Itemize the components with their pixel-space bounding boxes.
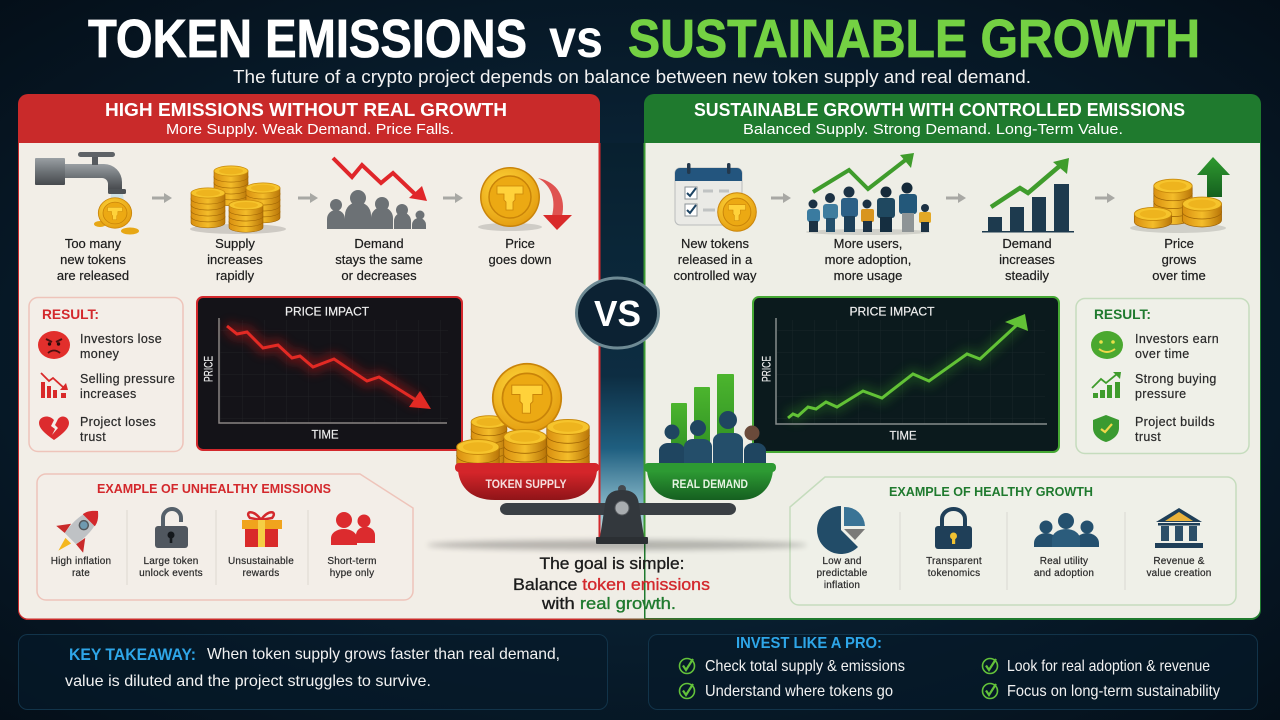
center gap and cream base <box>590 143 650 619</box>
icon: closed lock <box>935 509 972 549</box>
step labels <box>57 236 551 283</box>
badge: VS <box>576 278 658 348</box>
heading: right panel: SUSTAINABLE GROWTH WITH CONTROLLED EMISSIONS <box>694 99 1185 120</box>
panel: result positive: pressure <box>1135 387 1186 401</box>
panel: result positive: RESULT: <box>1094 306 1151 322</box>
green bowl: real demand <box>644 463 776 500</box>
chart: rising price impact: PRICE <box>760 356 774 382</box>
icon: broken heart <box>39 416 69 440</box>
icon: faucet with coin <box>35 152 139 234</box>
goal statement: with real growth. <box>541 594 676 613</box>
example labels: predictable <box>816 568 868 579</box>
heading: left panel: HIGH EMISSIONS WITHOUT REAL GROWTH <box>105 99 507 120</box>
panel: key takeaway: KEY TAKEAWAY: <box>69 646 196 664</box>
arrow <box>298 193 318 203</box>
icon: smiling face <box>1091 331 1123 359</box>
panel: invest like a pro: Check total supply & emissions <box>705 658 905 675</box>
step labels <box>673 236 1206 283</box>
example labels: Unsustainable <box>228 556 294 567</box>
icon: calendar with coin <box>675 163 757 232</box>
icon: rocket <box>45 498 111 564</box>
panel: result negative: increases <box>80 387 137 401</box>
step labels: more adoption, <box>825 252 911 267</box>
arrow <box>152 193 172 203</box>
step labels: controlled way <box>673 268 757 283</box>
icon: rising bar chart <box>982 158 1074 232</box>
title <box>88 9 1200 69</box>
example labels: Revenue & <box>1153 556 1205 567</box>
red bowl: token supply: TOKEN SUPPLY <box>486 479 567 491</box>
people row <box>807 182 931 232</box>
heading: left panel <box>105 99 507 138</box>
step labels: Demand <box>1002 236 1052 251</box>
panel: invest like a pro: Look for real adoption & revenue <box>1007 658 1210 675</box>
arrow <box>443 193 463 203</box>
icon: angry face <box>38 331 70 359</box>
panel: result positive: Investors earn <box>1135 332 1219 346</box>
step labels: Supply <box>215 236 255 251</box>
chart: rising price impact <box>753 297 1059 452</box>
step labels: more usage <box>834 268 902 283</box>
chart: rising price impact: TIME <box>890 428 916 442</box>
step labels: increases <box>207 252 263 267</box>
example labels: rate <box>72 568 90 579</box>
step labels: new tokens <box>60 252 126 267</box>
icon: gift <box>242 512 282 547</box>
panel: unhealthy emissions examples <box>37 474 413 600</box>
icon: shrinking crowd with falling arrow <box>327 158 427 229</box>
heading: left panel: More Supply. Weak Demand. Price Falls. <box>166 121 454 138</box>
example labels <box>816 556 1212 591</box>
example labels <box>51 556 377 579</box>
step labels: increases <box>999 252 1055 267</box>
icon: two people <box>331 512 375 545</box>
example labels: Short-term <box>327 556 377 567</box>
token supply pile <box>457 363 589 478</box>
heading: right panel <box>694 99 1185 138</box>
goal statement: The goal is simple: <box>540 554 684 573</box>
step labels: New tokens <box>681 236 749 251</box>
panel: healthy growth examples: EXAMPLE OF HEALTHY GROWTH <box>889 485 1093 499</box>
example labels: Large token <box>143 556 199 567</box>
panel: result positive: over time <box>1135 347 1190 361</box>
chart: falling price impact <box>197 297 462 450</box>
example labels: Transparent <box>926 556 982 567</box>
icon: three people <box>1034 513 1099 547</box>
icon: coins with up arrow <box>1130 157 1230 233</box>
panel: invest like a pro: Understand where tokens go <box>705 683 893 700</box>
panel: high emissions <box>18 94 600 620</box>
step labels: grows <box>1162 252 1197 267</box>
panel: unhealthy emissions examples: EXAMPLE OF UNHEALTHY EMISSIONS <box>97 482 331 496</box>
step labels: Demand <box>354 236 404 251</box>
panel: key takeaway: value is diluted and the project struggles to survive. <box>65 673 431 690</box>
step labels: are released <box>57 268 129 283</box>
icon: rising bars <box>1092 372 1121 398</box>
goal statement: Balance token emissions <box>513 575 710 594</box>
fulcrum <box>596 485 648 544</box>
step labels: Price <box>505 236 535 251</box>
step labels: Too many <box>65 236 122 251</box>
example labels: Low and <box>822 556 862 567</box>
icon: growing community with rising arrow <box>806 153 931 235</box>
example labels: hype only <box>330 568 374 579</box>
example labels: Real utility <box>1040 556 1088 567</box>
badge: VS: VS <box>594 293 641 334</box>
example labels: value creation <box>1146 568 1212 579</box>
step labels: over time <box>1152 268 1206 283</box>
example labels: inflation <box>824 580 860 591</box>
step labels: goes down <box>489 252 551 267</box>
balance scale <box>427 363 807 550</box>
icon: pie chart <box>817 506 865 554</box>
example labels: High inflation <box>51 556 111 567</box>
icon: coin going down <box>478 167 572 231</box>
panel bottom edge <box>26 618 1252 620</box>
panel: result negative: RESULT: <box>42 306 99 322</box>
icon: bank <box>1155 508 1203 548</box>
panel: result positive: Project builds <box>1135 415 1215 429</box>
arrow <box>946 193 966 203</box>
example labels: rewards <box>243 568 279 579</box>
step labels: released in a <box>678 252 753 267</box>
panel: key takeaway <box>18 634 608 710</box>
center divider borders <box>598 143 646 540</box>
icon: falling bars <box>41 373 68 398</box>
chart: rising price impact: PRICE IMPACT <box>850 304 935 318</box>
arrow <box>1095 193 1115 203</box>
panel: key takeaway: When token supply grows faster than real demand, <box>207 646 560 663</box>
step labels: steadily <box>1005 268 1050 283</box>
panel: result positive: Strong buying <box>1135 372 1217 386</box>
chart: falling price impact: PRICE IMPACT <box>285 304 370 318</box>
arrow <box>771 193 791 203</box>
panel: result negative: Selling pressure <box>80 372 175 386</box>
example labels: and adoption <box>1034 568 1094 579</box>
title: TOKEN EMISSIONS <box>88 9 527 69</box>
panel: result positive: trust <box>1135 430 1161 444</box>
goal statement <box>513 554 710 613</box>
green bowl: real demand: REAL DEMAND <box>672 479 748 491</box>
heading: right panel: Balanced Supply. Strong Demand. Long-Term Value. <box>743 121 1123 138</box>
icon: shield <box>1093 415 1119 442</box>
step labels: or decreases <box>341 268 417 283</box>
panel: result negative: Investors lose <box>80 332 162 346</box>
panel: result negative: trust <box>80 430 106 444</box>
title: SUSTAINABLE GROWTH <box>628 9 1200 69</box>
chart: falling price impact: PRICE <box>202 356 216 382</box>
panel: result negative <box>29 298 183 452</box>
panel: invest like a pro <box>648 634 1258 710</box>
panel: healthy growth examples <box>790 477 1236 605</box>
example labels: unlock events <box>139 568 203 579</box>
title: vs <box>549 9 603 69</box>
beam <box>500 503 736 515</box>
panel: invest like a pro: INVEST LIKE A PRO: <box>736 635 882 652</box>
red bowl: token supply <box>455 463 599 500</box>
subtitle: The future of a crypto project depends on balance between new token supply and real demand. <box>233 66 1031 87</box>
chart: falling price impact: TIME <box>312 428 338 442</box>
real demand bars and people <box>659 374 766 466</box>
panel: result positive <box>1076 298 1249 454</box>
step labels: rapidly <box>216 268 255 283</box>
icon: open lock <box>155 509 188 548</box>
example labels: tokenomics <box>928 568 980 579</box>
panel: sustainable growth <box>644 94 1261 620</box>
step labels: stays the same <box>335 252 423 267</box>
step labels: Price <box>1164 236 1194 251</box>
icon: coin stacks <box>190 166 286 234</box>
panel: result negative: money <box>80 347 120 361</box>
step labels: More users, <box>834 236 902 251</box>
panel: invest like a pro: Focus on long-term sustainability <box>1007 683 1220 700</box>
panel: result negative: Project loses <box>80 415 156 429</box>
